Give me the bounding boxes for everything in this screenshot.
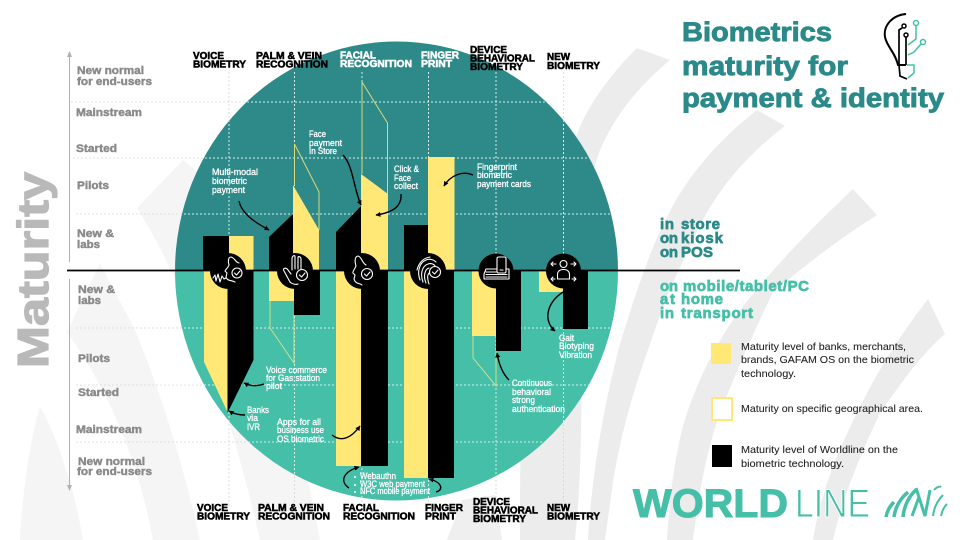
- callout: banks via IVR: IVR: [247, 422, 260, 432]
- top column headings: VOICE: [193, 50, 224, 62]
- callout: voice commerce: pilot: [266, 381, 283, 391]
- callout: multi-modal: [212, 167, 269, 230]
- title: Biometrics: [682, 17, 832, 47]
- icon: voice: [210, 253, 246, 289]
- title: maturity for: [682, 51, 849, 81]
- channels: in store: in: [660, 216, 674, 233]
- callout: apps for all: OS biometric: [277, 434, 325, 444]
- callout: fingerprint payment cards: [444, 162, 532, 189]
- channels: mobile: at: [660, 291, 675, 308]
- callout: banks via IVR: Banks: [247, 405, 270, 415]
- bottom column headings: DEVICE: [473, 496, 510, 508]
- callout: gait: Vibration: [559, 350, 592, 360]
- bars: new biometry: [539, 271, 588, 329]
- channels: in store: on: [660, 230, 678, 247]
- maturity level labels: labs: [77, 239, 100, 251]
- callout: continuous behavioral: authentication: [512, 404, 565, 414]
- icon: palm: [277, 253, 313, 289]
- maturity level labels: for end-users: [77, 466, 152, 478]
- callout: banks via IVR: via: [247, 413, 258, 423]
- callout: click and face collect: collect: [394, 181, 419, 191]
- legend: banks and merchants: technology.: [741, 368, 796, 380]
- callout: web and mobile payment list: [344, 467, 441, 496]
- title: [682, 17, 944, 113]
- top column headings: DEVICE: [470, 44, 507, 56]
- bottom column headings: PRINT: [425, 510, 457, 522]
- maturity level labels: New &: [78, 284, 115, 296]
- logo: Worldline: LINE: [795, 482, 870, 526]
- callout: multi-modal: Multi-modal: [212, 167, 258, 177]
- channels: in store: on: [660, 244, 678, 261]
- title: payment & identity: [682, 83, 944, 113]
- legend: banks and merchants: brands, GAFAM OS on the biometric: [741, 354, 914, 366]
- bars: facial recognition: [336, 82, 388, 466]
- bars: palm and vein recognition: [269, 144, 320, 363]
- bottom column headings: NEW: [547, 502, 570, 514]
- channels: in store: POS: [681, 244, 713, 261]
- callout: face payment: Face: [309, 129, 326, 139]
- bars: fingerprint: [404, 157, 454, 478]
- maturity level labels: labs: [78, 295, 101, 307]
- callout: apps for all: [277, 417, 360, 444]
- callout: face payment: In Store: [309, 146, 337, 156]
- legend: banks and merchants: Maturity level of banks, merchants,: [741, 341, 906, 353]
- icon: light bulb circuit: [885, 14, 926, 79]
- callout: face payment: [309, 129, 361, 205]
- channels: mobile: in: [660, 305, 674, 322]
- maturity level labels: Pilots: [78, 353, 110, 365]
- channels: mobile: home: [681, 291, 723, 308]
- channels: mobile: mobile/tablet/PC: [683, 278, 809, 295]
- top column headings: BEHAVIORAL: [470, 52, 536, 64]
- callout: continuous behavioral: strong: [512, 395, 535, 405]
- callout: gait: [548, 292, 594, 360]
- maturity level labels: Mainstream: [76, 107, 142, 119]
- callout: fingerprint payment cards: Fingerprint: [477, 162, 518, 172]
- legend: banks and merchants: [711, 341, 914, 380]
- callout: fingerprint payment cards: payment cards: [477, 179, 532, 189]
- callout: fingerprint payment cards: biometric: [477, 170, 513, 180]
- logo: Worldline: [633, 482, 947, 526]
- maturity level labels: [76, 65, 152, 478]
- callout: continuous behavioral: Continuous: [512, 378, 553, 388]
- bottom column headings: RECOGNITION: [343, 510, 415, 522]
- top column headings: BIOMETRY: [470, 61, 523, 73]
- axis title: Maturity: Maturity: [9, 171, 58, 368]
- channels: in store: [660, 216, 724, 261]
- top column headings: FINGER: [421, 50, 459, 62]
- callout: banks via IVR: [229, 405, 270, 432]
- bottom column headings: VOICE: [197, 502, 228, 514]
- callout: gait: Gait: [559, 333, 575, 343]
- callout: multi-modal: biometric: [212, 176, 248, 186]
- callout: web and mobile payment list: NFC mobile payment: [360, 486, 430, 496]
- top column headings: NEW: [547, 51, 570, 63]
- callout: continuous behavioral: [497, 353, 565, 414]
- bottom column headings: FACIAL: [343, 502, 380, 514]
- legend: geographical: Maturity on specific geographical area.: [741, 403, 923, 415]
- maturity level labels: Started: [78, 387, 119, 399]
- horizontal axis line: [67, 270, 740, 272]
- maturity grid, outside circle: [71, 72, 612, 505]
- top column headings: [193, 44, 600, 73]
- maturity level labels: for end-users: [77, 76, 152, 88]
- legend: worldline: Maturity level of Worldline on the: [741, 444, 898, 456]
- channels: mobile: on: [660, 278, 678, 295]
- callout: multi-modal: payment: [212, 185, 246, 195]
- bottom column headings: BIOMETRY: [197, 510, 250, 522]
- callout: gait: Biotyping: [559, 341, 594, 351]
- bottom column headings: BIOMETRY: [473, 513, 526, 525]
- callout: web and mobile payment list: W3C web payment: [360, 479, 425, 489]
- callout: web and mobile payment list: Webauthn: [360, 471, 396, 481]
- legend: geographical: [712, 398, 923, 420]
- bars: voice biometry: [203, 236, 254, 413]
- channels: mobile: [660, 278, 809, 322]
- callout: voice commerce: Voice commerce: [266, 365, 327, 375]
- maturity level labels: New normal: [78, 456, 145, 468]
- bottom column headings: BEHAVIORAL: [473, 504, 539, 516]
- bottom column headings: [197, 496, 600, 525]
- logo: Worldline: WORLD: [633, 482, 788, 526]
- top column headings: BIOMETRY: [547, 60, 600, 72]
- bottom column headings: FINGER: [425, 502, 463, 514]
- maturity level labels: Started: [76, 143, 117, 155]
- callout: click and face collect: [376, 164, 419, 215]
- icon: person with arrows: [546, 254, 581, 288]
- channels: in store: store: [681, 216, 720, 233]
- callout: voice commerce: [244, 365, 327, 391]
- top column headings: RECOGNITION: [256, 58, 328, 70]
- maturity level labels: Pilots: [77, 180, 109, 192]
- bottom column headings: RECOGNITION: [258, 510, 330, 522]
- legend: worldline: biometric technology.: [741, 458, 844, 470]
- bottom column headings: BIOMETRY: [547, 510, 600, 522]
- top column headings: PRINT: [421, 58, 453, 70]
- circle: mobile half: [175, 271, 618, 500]
- channels: in store: kiosk: [681, 230, 724, 247]
- bottom column headings: PALM & VEIN: [258, 502, 324, 514]
- maturity level labels: Mainstream: [76, 424, 142, 436]
- icon: fingerprint: [410, 253, 446, 289]
- top column headings: FACIAL: [340, 50, 377, 62]
- callout: apps for all: Apps for all: [277, 417, 321, 427]
- maturity grid, inside circle: [182, 72, 610, 498]
- maturity level labels: New &: [77, 228, 114, 240]
- callout: click and face collect: Face: [394, 173, 411, 183]
- callout: voice commerce: for Gas station: [266, 373, 320, 383]
- top column headings: PALM & VEIN: [256, 50, 322, 62]
- channels: mobile: transport: [681, 305, 753, 322]
- callout: click and face collect: Click &: [394, 164, 419, 174]
- icon: device: [478, 254, 514, 288]
- maturity level labels: New normal: [77, 65, 144, 77]
- legend: worldline: [712, 444, 898, 470]
- circle: in-store half: [175, 41, 618, 271]
- bars: device behavioral biometry: [472, 271, 521, 386]
- icon: face: [344, 253, 380, 289]
- callout: continuous behavioral: behavioral: [512, 387, 551, 397]
- top column headings: BIOMETRY: [193, 58, 246, 70]
- callout: apps for all: business use: [277, 425, 324, 435]
- top column headings: RECOGNITION: [340, 58, 412, 70]
- callout: face payment: payment: [309, 138, 343, 148]
- vertical maturity axis arrows: [67, 51, 72, 491]
